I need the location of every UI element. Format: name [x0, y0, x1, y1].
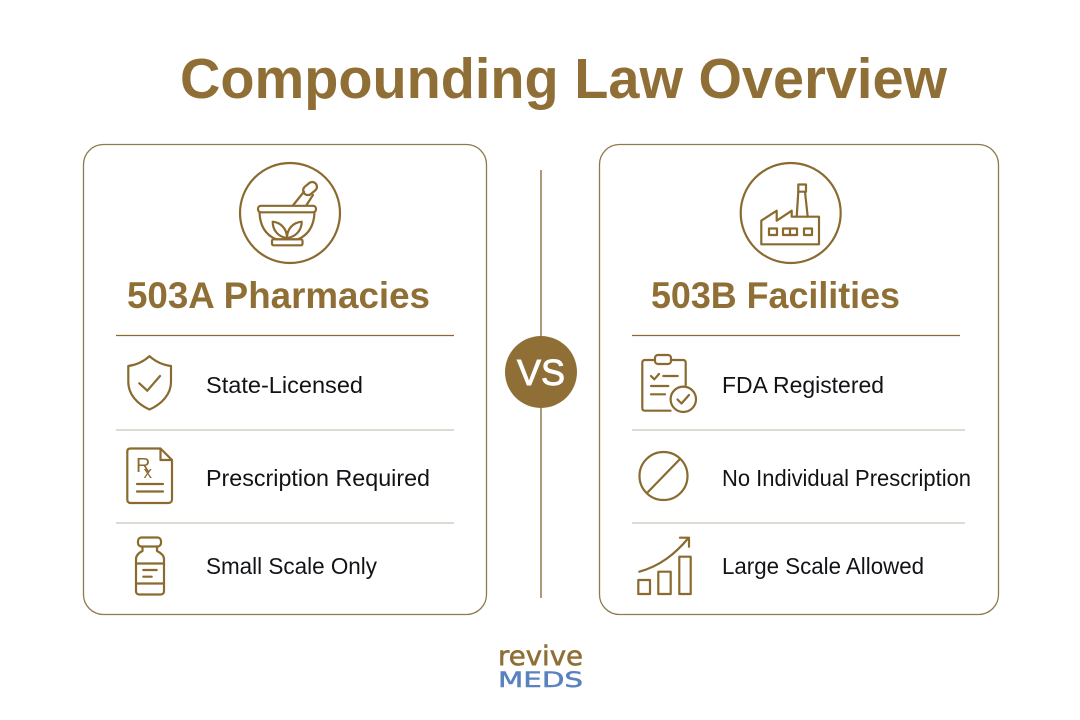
heading: 503A Pharmacies: 503A Pharmacies	[127, 275, 430, 316]
icon: prescription document	[127, 448, 172, 503]
text: FDA Registered: FDA Registered	[722, 372, 884, 398]
title: Compounding Law Overview	[180, 47, 948, 111]
icon: growth chart	[638, 538, 691, 594]
icon: prohibition sign	[640, 452, 688, 500]
text: Prescription Required: Prescription Required	[206, 465, 430, 491]
icon: prescription document: R	[136, 455, 150, 477]
panel: 503B Facilities	[600, 144, 998, 614]
VS badge	[505, 336, 577, 408]
center divider line	[540, 170, 542, 598]
icon: mortar and pestle	[240, 163, 340, 263]
text: Large Scale Allowed: Large Scale Allowed	[722, 553, 924, 579]
heading: 503B Facilities: 503B Facilities	[651, 275, 900, 316]
icon: prescription document: x	[144, 463, 152, 482]
logo: revive meds: MEDS	[498, 668, 583, 692]
text: Small Scale Only: Small Scale Only	[206, 553, 377, 579]
text: State-Licensed: State-Licensed	[206, 372, 363, 398]
icon: medicine vial	[136, 538, 164, 594]
text: No Individual Prescription: No Individual Prescription	[722, 465, 971, 491]
icon: shield with check	[128, 356, 171, 410]
icon: factory	[741, 163, 841, 263]
logo: revive meds: revive	[498, 641, 583, 672]
icon: clipboard with check	[642, 355, 696, 412]
panel: 503A Pharmacies	[84, 144, 486, 614]
logo: revive meds	[498, 641, 583, 692]
VS badge: VS	[517, 352, 565, 393]
